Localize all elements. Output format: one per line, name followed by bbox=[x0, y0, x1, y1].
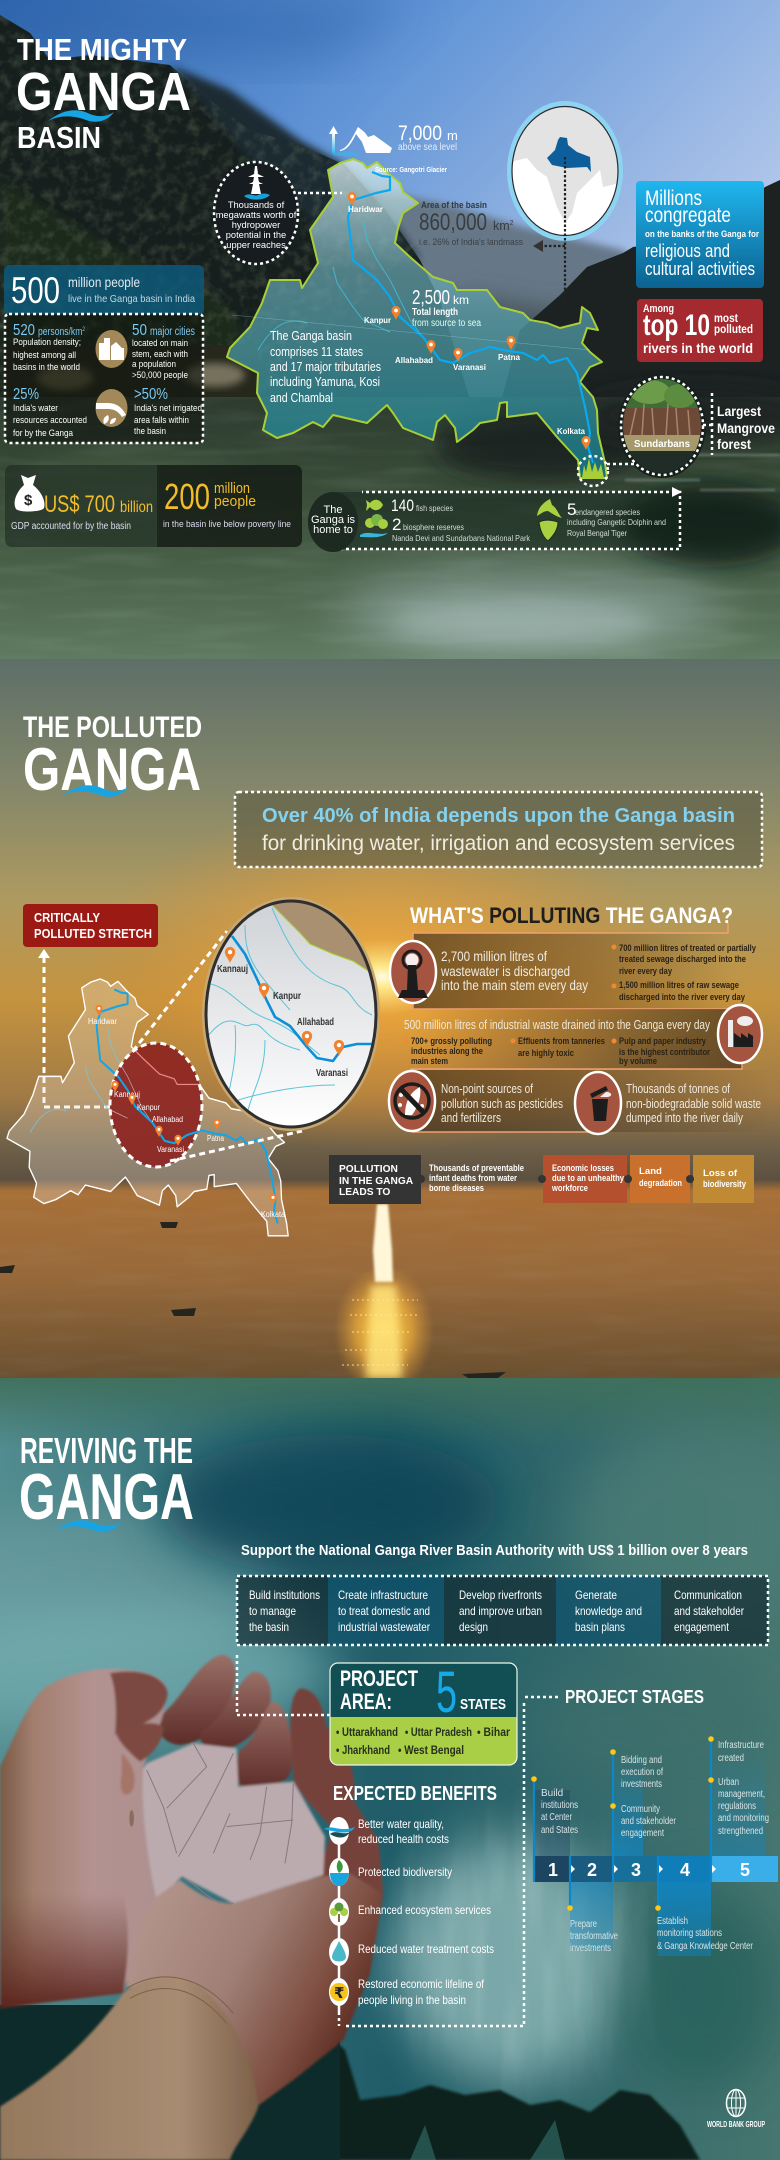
timeline: project stages: Establish bbox=[657, 1916, 688, 1927]
heading: project stages: PROJECT STAGES bbox=[565, 1687, 704, 1707]
panel: wastewater: treated sewage discharged into the bbox=[619, 954, 746, 964]
panel: Ganga is home to: The bbox=[324, 504, 342, 516]
timeline: project stages: created bbox=[718, 1753, 744, 1764]
panel: wastewater bbox=[390, 923, 756, 1009]
city pins and labels: Allahabad bbox=[395, 355, 433, 365]
panel: industrial waste: 500 million litres of industrial waste drained into the Ganga every day bbox=[404, 1018, 711, 1032]
panel: population and water stats: a population bbox=[132, 359, 176, 369]
flow: pollution leads to: infant deaths from water bbox=[429, 1173, 517, 1183]
panel: population and water stats: Population density; bbox=[13, 337, 81, 347]
panel: industrial waste: is the highest contributor bbox=[619, 1047, 710, 1057]
panel: industrial waste: industries along the bbox=[411, 1046, 483, 1056]
panel: 500 million people: live in the Ganga basin in India bbox=[68, 293, 195, 305]
stat: altitude: m bbox=[447, 128, 458, 143]
callout: hydropower: potential in the bbox=[226, 230, 286, 240]
flow: pollution leads to: POLLUTION bbox=[339, 1164, 398, 1175]
timeline: project stages: transformative bbox=[570, 1931, 618, 1942]
panel: GDP and poverty: GDP accounted for by the basin bbox=[11, 521, 131, 532]
panel: wastewater: 700 million litres of treated or partially bbox=[619, 943, 756, 953]
text: map description: The Ganga basin bbox=[270, 329, 352, 343]
panel: GDP and poverty: US$ 700 bbox=[44, 491, 115, 518]
callout: hydropower: upper reaches bbox=[226, 240, 286, 250]
panel: five support areas: and improve urban bbox=[459, 1604, 542, 1618]
illustration: cupped hands bbox=[0, 1655, 383, 2160]
stat: altitude: Source: Gangotri Glacier bbox=[375, 165, 447, 174]
panel: Ganga is home to: biosphere reserves bbox=[403, 522, 464, 532]
callout: over 40 percent: for drinking water, irrigation and ecosystem services bbox=[262, 832, 735, 855]
panel: industrial waste: are highly toxic bbox=[518, 1048, 574, 1058]
panel: non-point sources and solid waste: dumped into the river daily bbox=[626, 1111, 744, 1125]
panel: five support areas: Create infrastructure bbox=[338, 1588, 428, 1602]
panel: wastewater: discharged into the river every day bbox=[619, 992, 745, 1002]
callout: millions congregate: religious and bbox=[645, 241, 730, 261]
panel: five support areas: Develop riverfronts bbox=[459, 1588, 542, 1602]
timeline: project stages: monitoring stations bbox=[657, 1928, 722, 1939]
callout: hydropower: Thousands of bbox=[228, 200, 285, 210]
stat: basin area bbox=[419, 200, 523, 248]
text: map description: comprises 11 states bbox=[270, 345, 363, 359]
logo: World Bank Group bbox=[707, 2090, 765, 2129]
panel: non-point sources and solid waste: Thousands of tonnes of bbox=[626, 1082, 730, 1096]
title: The Polluted Ganga: GANGA bbox=[23, 736, 201, 803]
timeline: project stages: strengthened bbox=[718, 1826, 763, 1837]
callout: millions congregate: Millions bbox=[645, 187, 702, 210]
panel: project area: STATES bbox=[460, 1696, 506, 1713]
timeline: project stages: Bidding and bbox=[621, 1755, 662, 1766]
map: Ganga basin with rivers bbox=[227, 159, 607, 478]
title: The Mighty Ganga Basin: GANGA bbox=[16, 62, 191, 122]
callout: hydropower bbox=[214, 162, 342, 264]
panel: five support areas: Communication bbox=[674, 1588, 742, 1602]
panel: industrial waste bbox=[404, 1005, 762, 1069]
magnified map lens: Varanasi bbox=[316, 1068, 348, 1079]
flow: pollution leads to: due to an unhealthy bbox=[552, 1173, 624, 1183]
text: map description: and 17 major tributaries bbox=[270, 360, 381, 374]
panel: project area: • Bihar bbox=[477, 1725, 510, 1739]
city pins and labels: Varanasi bbox=[453, 362, 486, 372]
panel: 500 million people: million people bbox=[68, 274, 140, 290]
stat: total length: km bbox=[453, 293, 469, 307]
stat: altitude bbox=[375, 122, 458, 174]
stat: total length: 2,500 bbox=[412, 287, 450, 309]
callout: top 10 polluted: Among bbox=[643, 303, 674, 315]
panel: project area: • Jharkhand bbox=[336, 1743, 390, 1757]
panel: population and water stats: 50 bbox=[132, 322, 147, 339]
city pins and labels: Haridwar bbox=[348, 204, 384, 214]
panel: industrial waste: Pulp and paper industry bbox=[619, 1036, 706, 1046]
panel: wastewater: 2,700 million litres of bbox=[441, 948, 547, 964]
timeline: project stages: investments bbox=[570, 1943, 611, 1954]
callout: Sundarbans mangrove: forest bbox=[717, 436, 751, 452]
panel: population and water stats: 25% bbox=[13, 386, 39, 403]
panel: industrial waste: by volume bbox=[619, 1056, 657, 1066]
panel: industrial waste: Effluents from tanneries bbox=[518, 1036, 605, 1046]
timeline: project stages: execution of bbox=[621, 1767, 663, 1778]
timeline: project stages bbox=[531, 1736, 778, 1956]
list: expected benefits: Restored economic lifeline of bbox=[358, 1977, 485, 1991]
panel: 500 million people: 500 bbox=[11, 270, 60, 311]
panel: five support areas: the basin bbox=[249, 1620, 289, 1634]
callout: hydropower: megawatts worth of bbox=[216, 210, 297, 220]
flow: pollution leads to: Land bbox=[639, 1166, 662, 1177]
connector: dotted frame around benefits bbox=[346, 1703, 524, 2026]
panel: five support areas: Generate bbox=[575, 1588, 617, 1602]
timeline: project stages: engagement bbox=[621, 1828, 664, 1839]
label: critically polluted stretch: CRITICALLY bbox=[34, 911, 101, 925]
timeline: project stages: Build bbox=[541, 1788, 563, 1799]
city labels on small map: Varanasi bbox=[157, 1145, 184, 1154]
callout: millions congregate: cultural activities bbox=[645, 259, 755, 279]
connector: dotted link to project area bbox=[237, 1655, 330, 1715]
city labels on small map: Patna bbox=[207, 1134, 224, 1143]
timeline: project stages: regulations bbox=[718, 1801, 756, 1812]
label: critically polluted stretch bbox=[23, 904, 158, 947]
list: expected benefits: Protected biodiversity bbox=[358, 1865, 452, 1879]
flow: pollution leads to: workforce bbox=[551, 1183, 588, 1193]
panel: GDP and poverty: 200 bbox=[164, 476, 210, 517]
panel: project area: 5 bbox=[436, 1660, 457, 1725]
title: Reviving the Ganga: REVIVING THE bbox=[20, 1430, 193, 1471]
magnified map lens bbox=[202, 890, 385, 1131]
city labels on small map bbox=[88, 1005, 285, 1219]
panel: population and water stats: the basin bbox=[134, 426, 166, 436]
callout: top 10 polluted: polluted bbox=[714, 322, 753, 336]
text: map description bbox=[270, 329, 381, 405]
flow: pollution leads to bbox=[329, 1155, 754, 1204]
panel: wastewater: wastewater is discharged bbox=[440, 963, 570, 979]
arrow: stretch pointer bbox=[38, 949, 110, 1107]
timeline: project stages: 4 bbox=[680, 1860, 690, 1880]
flow: pollution leads to: biodiversity bbox=[703, 1179, 747, 1190]
map: polluted stretch basin bbox=[7, 931, 302, 1236]
city pins and labels: Kolkata bbox=[557, 426, 585, 436]
panel: GDP and poverty: people bbox=[214, 493, 256, 510]
panel: Ganga is home to: Nanda Devi and Sundarbans National Park bbox=[392, 533, 531, 543]
timeline: project stages: 3 bbox=[631, 1860, 641, 1880]
panel: GDP and poverty: in the basin live below poverty line bbox=[163, 519, 291, 530]
panel: project area bbox=[330, 1660, 517, 1765]
flow: pollution leads to: borne diseases bbox=[429, 1183, 484, 1193]
panel: population and water stats: major cities bbox=[150, 326, 195, 338]
magnified map lens: Kannauj bbox=[217, 964, 248, 975]
panel: five support areas: knowledge and bbox=[575, 1604, 642, 1618]
callout: over 40 percent: Over 40% of India depends upon the Ganga basin bbox=[262, 804, 735, 827]
timeline: project stages: at Center bbox=[541, 1812, 572, 1823]
callout: top 10 polluted: most bbox=[714, 311, 738, 325]
magnified map lens: Kanpur bbox=[273, 991, 301, 1002]
panel: Ganga is home to: Royal Bengal Tiger bbox=[567, 528, 627, 538]
stat: basin area: km bbox=[493, 219, 510, 233]
city pins and labels bbox=[348, 192, 590, 450]
panel: population and water stats: 2 bbox=[82, 327, 86, 333]
panel: population and water stats: resources accounted bbox=[13, 415, 87, 425]
city labels on small map: Haridwar bbox=[88, 1017, 117, 1026]
panel: industrial waste: main stem bbox=[411, 1056, 448, 1066]
callout: hydropower: hydropower bbox=[232, 220, 280, 230]
title: The Mighty Ganga Basin: BASIN bbox=[17, 120, 101, 155]
timeline: project stages: & Ganga Knowledge Center bbox=[657, 1941, 754, 1952]
panel: wastewater: into the main stem every day bbox=[441, 977, 588, 993]
flow: pollution leads to: Economic losses bbox=[552, 1163, 614, 1173]
panel: 500 million people bbox=[4, 265, 204, 315]
panel: five support areas: Build institutions bbox=[249, 1588, 320, 1602]
panel: non-point sources and solid waste: pollution such as pesticides bbox=[441, 1097, 563, 1111]
panel: project area: • Uttar Pradesh bbox=[405, 1725, 472, 1739]
title: The Mighty Ganga Basin bbox=[16, 32, 191, 155]
panel: population and water stats: 520 bbox=[13, 322, 35, 339]
callout: top 10 polluted: rivers in the world bbox=[643, 340, 753, 356]
timeline: project stages: Infrastructure bbox=[718, 1740, 764, 1751]
inset map: India locator bbox=[507, 101, 623, 290]
timeline: project stages: 1 bbox=[548, 1860, 558, 1880]
panel: five support areas: to manage bbox=[249, 1604, 296, 1618]
title: The Mighty Ganga Basin: THE MIGHTY bbox=[17, 32, 187, 67]
stat: altitude: above sea level bbox=[398, 142, 457, 153]
timeline: project stages: institutions bbox=[541, 1800, 578, 1811]
text: map description: including Yamuna, Kosi bbox=[270, 375, 380, 389]
timeline: project stages: Community bbox=[621, 1804, 660, 1815]
callout: millions congregate bbox=[636, 181, 764, 288]
panel: non-point sources and solid waste: and fertilizers bbox=[441, 1111, 501, 1125]
panel: population and water stats: persons/km bbox=[38, 326, 95, 338]
icon: mountain with arrow bbox=[329, 126, 392, 156]
panel: five support areas: to treat domestic and bbox=[338, 1604, 430, 1618]
panel: population and water stats: India's water bbox=[13, 403, 58, 413]
panel: non-point sources and solid waste: Non-point sources of bbox=[441, 1082, 533, 1096]
panel: population and water stats: India's net irrigated bbox=[134, 403, 202, 413]
timeline: project stages: Prepare bbox=[570, 1919, 597, 1930]
panel: population and water stats: highest among all bbox=[13, 350, 76, 360]
panel: project area: PROJECT bbox=[340, 1666, 418, 1691]
stat: basin area: i.e. 26% of India's landmass bbox=[419, 237, 523, 248]
panel: Ganga is home to: endangered species bbox=[575, 507, 640, 517]
city pins and labels: Patna bbox=[498, 352, 520, 362]
title: Reviving the Ganga: GANGA bbox=[19, 1460, 194, 1533]
city labels on small map: Allahabad bbox=[152, 1115, 183, 1124]
panel: Ganga is home to: including Gangetic Dolphin and bbox=[567, 517, 666, 527]
heading: expected benefits: EXPECTED BENEFITS bbox=[333, 1783, 497, 1805]
timeline: project stages: and stakeholder bbox=[621, 1816, 677, 1827]
city pins and labels: Kanpur bbox=[364, 315, 392, 325]
city labels on small map: Kannauj bbox=[114, 1090, 140, 1099]
list: expected benefits: Enhanced ecosystem services bbox=[358, 1903, 491, 1917]
panel: population and water stats: for by the Ganga bbox=[13, 428, 74, 438]
flow: pollution leads to: LEADS TO bbox=[339, 1187, 390, 1198]
panel: reviving Ganga background photo bbox=[0, 1378, 780, 2160]
panel: Ganga is home to: 5 bbox=[567, 500, 576, 519]
panel: Ganga is home to: fish species bbox=[416, 503, 453, 513]
list: expected benefits: ₹ bbox=[334, 1984, 344, 2002]
panel: mighty Ganga background photo bbox=[0, 0, 780, 659]
panel: five support areas: basin plans bbox=[575, 1620, 625, 1634]
panel: five support areas: industrial wastewater bbox=[338, 1620, 430, 1634]
callout: top 10 polluted: top 10 bbox=[643, 309, 710, 342]
panel: project area: • West Bengal bbox=[398, 1743, 464, 1757]
timeline: project stages: and States bbox=[541, 1825, 578, 1836]
flow: pollution leads to: degradation bbox=[639, 1178, 682, 1189]
city labels on small map: Kanpur bbox=[137, 1103, 160, 1112]
city labels on small map: Kolkata bbox=[261, 1210, 285, 1219]
panel: Ganga is home to: 2 bbox=[392, 515, 401, 534]
panel: population and water stats: >50% bbox=[134, 386, 168, 403]
title: Reviving the Ganga bbox=[19, 1430, 194, 1533]
list: expected benefits: Better water quality, bbox=[358, 1817, 444, 1831]
panel: wastewater: 1,500 million litres of raw sewage bbox=[619, 980, 739, 990]
panel: polluted Ganga background photo bbox=[0, 659, 780, 1395]
callout: Sundarbans mangrove: Largest bbox=[717, 403, 761, 419]
panel: industrial waste: 700+ grossly polluting bbox=[411, 1036, 492, 1046]
stat: total length: from source to sea bbox=[412, 318, 481, 329]
list: expected benefits bbox=[324, 1817, 494, 2026]
panel: population and water stats bbox=[5, 314, 203, 443]
flow: pollution leads to: Thousands of preventable bbox=[429, 1163, 524, 1173]
heading: what's polluting the Ganga: WHAT'S POLLUTING THE GANGA? bbox=[410, 903, 733, 928]
timeline: project stages: management, bbox=[718, 1789, 765, 1800]
title: The Polluted Ganga bbox=[23, 711, 202, 803]
panel: population and water stats: stem, each with bbox=[132, 349, 188, 359]
stat: basin area: Area of the basin bbox=[421, 200, 487, 210]
panel: population and water stats: basins in the world bbox=[13, 362, 80, 372]
list: expected benefits: people living in the basin bbox=[358, 1993, 466, 2007]
callout: Sundarbans mangrove bbox=[578, 374, 775, 486]
flow: pollution leads to: IN THE GANGA bbox=[339, 1176, 414, 1187]
callout: millions congregate: congregate bbox=[645, 204, 731, 227]
list: expected benefits: reduced health costs bbox=[358, 1832, 449, 1846]
panel: five support areas bbox=[237, 1576, 768, 1645]
stat: total length bbox=[412, 287, 481, 329]
list: expected benefits: Reduced water treatment costs bbox=[358, 1942, 494, 1956]
stat: altitude: 7,000 bbox=[398, 122, 442, 145]
flow: pollution leads to: Loss of bbox=[703, 1168, 738, 1179]
panel: project area: • Uttarakhand bbox=[336, 1725, 398, 1739]
callout: top 10 polluted bbox=[637, 299, 763, 362]
label: critically polluted stretch: POLLUTED STRETCH bbox=[34, 927, 152, 941]
panel: GDP and poverty: $ bbox=[24, 492, 33, 509]
panel: population and water stats: >50,000 people bbox=[132, 370, 188, 380]
timeline: project stages: investments bbox=[621, 1779, 662, 1790]
panel: wastewater: river every day bbox=[619, 966, 672, 976]
stat: basin area: 860,000 bbox=[419, 209, 487, 236]
title: The Polluted Ganga: THE POLLUTED bbox=[23, 711, 202, 744]
panel: GDP and poverty: billion bbox=[120, 499, 153, 516]
panel: project area: AREA: bbox=[340, 1689, 392, 1714]
panel: non-point sources and solid waste bbox=[389, 1070, 772, 1134]
panel: Ganga is home to bbox=[308, 487, 682, 552]
panel: Ganga is home to: 140 bbox=[391, 496, 414, 515]
panel: five support areas: design bbox=[459, 1620, 488, 1634]
callout: over 40 percent bbox=[235, 792, 762, 867]
panel: Ganga is home to: Ganga is bbox=[311, 514, 356, 526]
magnified map lens: Allahabad bbox=[297, 1017, 334, 1028]
callout: Sundarbans mangrove: Sundarbans bbox=[634, 438, 690, 450]
panel: GDP and poverty bbox=[5, 465, 302, 547]
panel: five support areas: engagement bbox=[674, 1620, 730, 1634]
timeline: project stages: Urban bbox=[718, 1777, 739, 1788]
stat: basin area: 2 bbox=[510, 220, 514, 227]
timeline: project stages: 5 bbox=[740, 1860, 750, 1880]
timeline: project stages: 2 bbox=[587, 1860, 597, 1880]
text: map description: and Chambal bbox=[270, 391, 333, 405]
stat: total length: Total length bbox=[412, 307, 458, 318]
callout: millions congregate: on the banks of the Ganga for bbox=[645, 229, 760, 239]
panel: Ganga is home to: home to bbox=[313, 524, 353, 536]
panel: five support areas: and stakeholder bbox=[674, 1604, 744, 1618]
panel: GDP and poverty: million bbox=[214, 480, 250, 497]
panel: population and water stats: area falls within bbox=[134, 415, 189, 425]
panel: population and water stats: located on main bbox=[132, 338, 188, 348]
